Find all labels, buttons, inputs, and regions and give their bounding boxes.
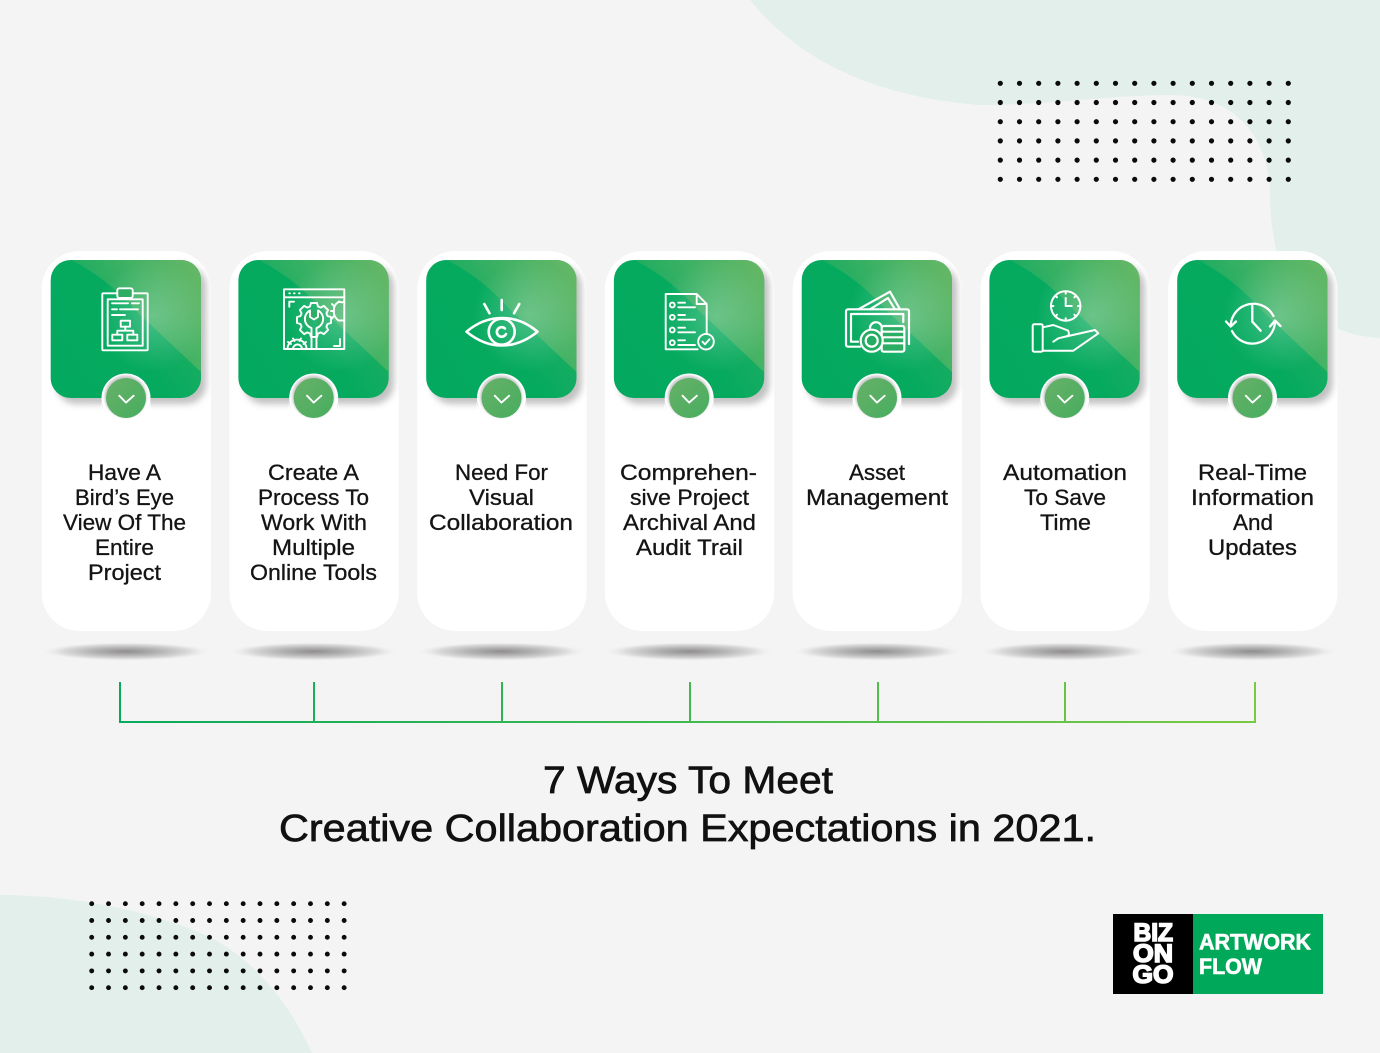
card 2 text: Work With (261, 510, 367, 535)
panel: card 3 (416, 251, 588, 661)
card 3 text: Collaboration (429, 510, 573, 535)
card 2 text (250, 460, 377, 585)
card 7 text (1191, 460, 1314, 560)
dot grid: bottom left (92, 904, 346, 988)
card 4 base (603, 251, 775, 661)
card 3 base (416, 251, 588, 661)
card 1 text: Bird’s Eye (75, 485, 174, 510)
panel: card 7 (1166, 251, 1338, 661)
card 1 text: Project (88, 560, 161, 585)
card 4 text: sive Project (630, 485, 749, 510)
card 4 text: Audit Trail (636, 535, 743, 560)
icon: gear and wrench window (284, 289, 344, 349)
panel: card 1 (40, 251, 212, 661)
card 2 text: Multiple (272, 535, 355, 560)
card 3 text: Visual (469, 485, 534, 510)
panel: card 4 (603, 251, 775, 661)
bracket connector lines (119, 682, 1256, 723)
card 4 text (620, 460, 757, 560)
icon: clipboard with org chart (102, 288, 148, 350)
icon: checklist document (666, 294, 714, 350)
card 1 base (40, 251, 212, 661)
card 7 text: And (1233, 510, 1273, 535)
card 7 base (1166, 251, 1338, 661)
card 6 text (1003, 460, 1127, 535)
title: 7 Ways To Meet (543, 760, 833, 802)
card 2 text: Process To (258, 485, 369, 510)
panel: card 6 (979, 251, 1151, 661)
panel: card 2 (228, 251, 400, 661)
icon: clock over open hand (1033, 291, 1098, 352)
card 5 text: Management (806, 485, 948, 510)
title: Creative Collaboration Expectations in 2021. (279, 808, 1096, 850)
card 2 text: Online Tools (250, 560, 377, 585)
panel: card 5 (791, 251, 963, 661)
card 5 base (791, 251, 963, 661)
card 7 text: Information (1191, 485, 1314, 510)
icon: clock with circular arrows (1226, 304, 1280, 344)
card 3 text: Need For (455, 460, 548, 485)
card 1 text: Have A (88, 460, 161, 485)
card 4 text: Comprehen- (620, 460, 757, 485)
card 6 text: Time (1040, 510, 1091, 535)
card 6 base (979, 251, 1151, 661)
logo: Bizongo Artwork Flow: BIZ (1134, 919, 1173, 947)
decorative blob: bottom left (0, 895, 312, 1053)
dot grid: top right (1000, 83, 1290, 179)
icon: money and coins (846, 292, 909, 352)
card 7 text: Updates (1208, 535, 1297, 560)
logo: Bizongo Artwork Flow: FLOW (1199, 954, 1262, 979)
card 6 text: Automation (1003, 460, 1127, 485)
card 7 text: Real-Time (1198, 460, 1307, 485)
card 1 text (63, 460, 186, 585)
card 3 text (429, 460, 573, 535)
card 5 text: Asset (849, 460, 905, 485)
card 4 text: Archival And (623, 510, 756, 535)
card 2 base (228, 251, 400, 661)
logo: Bizongo Artwork Flow: ARTWORK (1199, 930, 1311, 954)
card 6 text: To Save (1024, 485, 1106, 510)
icon: eye (466, 300, 538, 346)
logo: Bizongo Artwork Flow (1113, 914, 1323, 994)
card 5 text (806, 460, 948, 510)
card 2 text: Create A (268, 460, 359, 485)
decorative blob: top right (750, 0, 1380, 338)
card 1 text: Entire (95, 535, 154, 560)
card 1 text: View Of The (63, 510, 186, 535)
title (279, 760, 1096, 850)
logo: Bizongo Artwork Flow: GO (1132, 961, 1174, 989)
logo: Bizongo Artwork Flow: ON (1133, 940, 1173, 968)
